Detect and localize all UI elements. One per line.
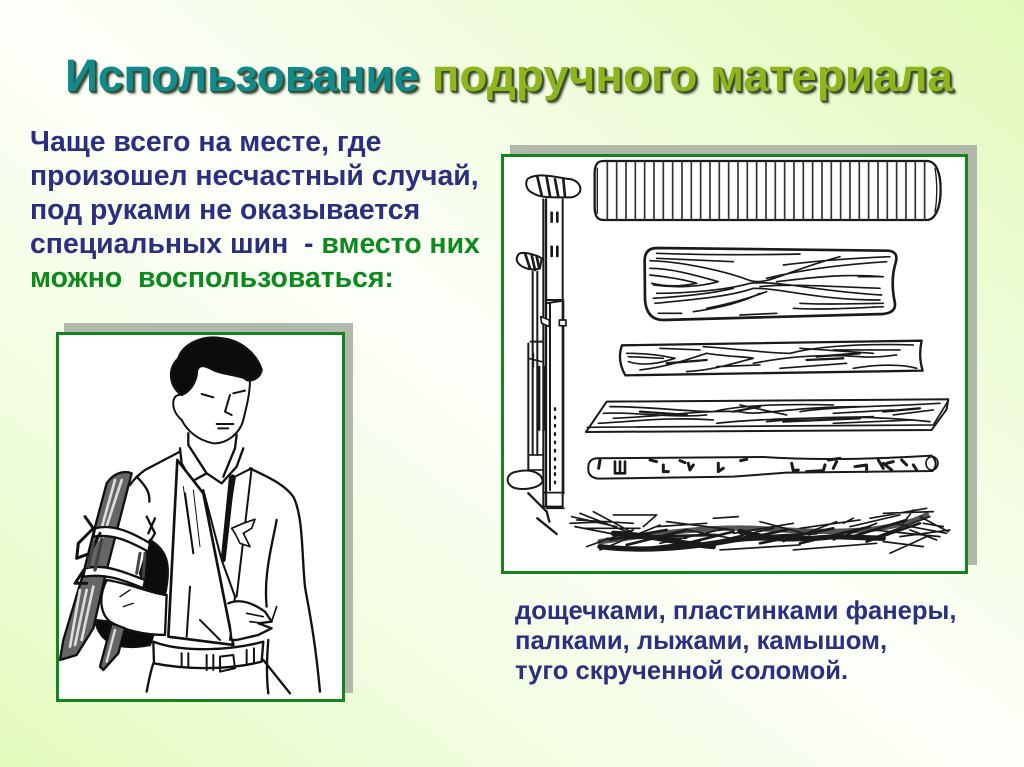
- belt: [153, 642, 263, 668]
- torso and right arm: [130, 452, 320, 693]
- item: ribbed splint board: [595, 161, 941, 220]
- text block: intro: [30, 126, 480, 294]
- item: long thin board: [586, 399, 948, 432]
- item: wide wooden board: [645, 248, 896, 320]
- item: twisted straw rope: [570, 508, 950, 553]
- illustration: man with splinted arm in a sling: [60, 338, 320, 693]
- panel: injured person illustration: [58, 323, 353, 700]
- text block: list of improvised materials: дощечками, пластинками фанеры,: [515, 597, 957, 625]
- title: Использование подручного материала: [65, 50, 953, 101]
- bandage ties: [93, 527, 150, 552]
- panel: improvised splint materials illustration: [502, 145, 977, 572]
- text block: intro: можно воспользоваться:: [30, 262, 394, 294]
- text block: list of improvised materials: палками, лыжами, камышом,: [515, 627, 887, 655]
- text block: intro: специальных шин - вместо них: [30, 228, 480, 260]
- sling knot: [232, 519, 255, 547]
- neck and collar: [180, 433, 243, 483]
- text block: intro: произошел несчастный случай,: [30, 160, 479, 192]
- dark underside of arm: [140, 540, 168, 595]
- hair: [171, 338, 262, 395]
- text block: list of improvised materials: туго скрученной соломой.: [515, 657, 848, 685]
- illustrations of materials: [508, 161, 950, 553]
- shoulder and upper arm: [101, 477, 167, 635]
- text block: intro: под руками не оказывается: [30, 194, 420, 226]
- hand: [228, 601, 272, 640]
- item: wooden plank: [620, 341, 923, 375]
- text block: list of improvised materials: [515, 597, 957, 685]
- item: Dieterichs-style crutch splint: [508, 175, 580, 534]
- splints: [60, 472, 132, 660]
- text block: intro: Чаще всего на месте, где: [30, 126, 381, 158]
- item: birch pole: [588, 456, 938, 479]
- face: [173, 380, 250, 443]
- sling: [168, 460, 233, 645]
